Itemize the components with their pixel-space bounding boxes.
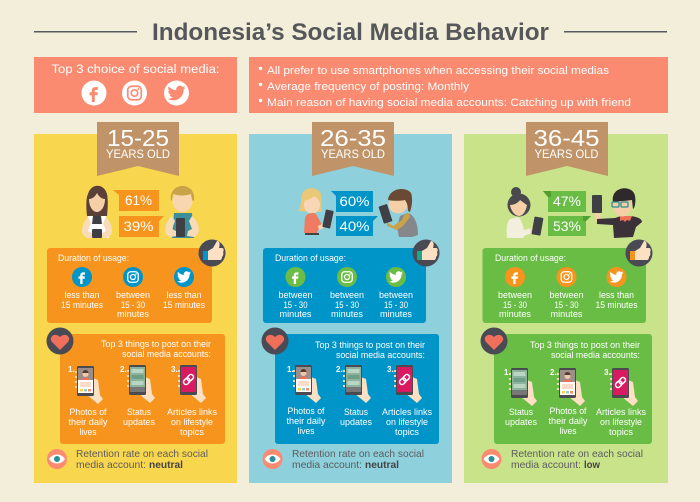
duration panel: 15 minutes <box>163 300 205 310</box>
posting panel: social media accounts: <box>551 350 640 360</box>
posting panel: lives <box>560 426 577 436</box>
illustration: older man with selfie phone <box>592 188 642 238</box>
icon: heart <box>262 328 288 354</box>
posting panel: Photos of <box>70 407 107 417</box>
panel: general facts: Average frequency of posting: Monthly <box>267 81 470 93</box>
duration panel: minutes <box>331 309 364 319</box>
duration panel: between <box>379 290 413 300</box>
retention text: Retention rate on each social <box>292 448 424 460</box>
posting panel: Top 3 things to post on their <box>101 339 211 349</box>
duration panel: minutes <box>550 309 583 319</box>
duration panel: minutes <box>117 309 150 319</box>
40% tag <box>336 216 378 236</box>
panel: age 26-35 <box>249 122 452 483</box>
47% tag <box>543 191 586 212</box>
posting panel: Status <box>509 407 533 417</box>
duration panel <box>47 248 212 323</box>
retention text: Retention rate on each social <box>76 448 208 460</box>
duration panel: 15 - 30 <box>554 300 578 310</box>
duration panel: less than <box>64 290 100 300</box>
posting panel: updates <box>505 417 537 427</box>
posting panel: topics <box>180 427 205 437</box>
60% tag: 60% <box>340 193 370 209</box>
posting panel: 3. <box>387 365 394 374</box>
posting panel: Top 3 things to post on their <box>530 340 640 350</box>
age ribbon 36-45: YEARS OLD <box>534 149 598 161</box>
posting panel: Articles links <box>382 407 432 417</box>
retention text: media account: <box>292 459 362 471</box>
illustration: man with phone <box>378 189 418 237</box>
retention text: media account: <box>76 459 146 471</box>
retention text: neutral <box>149 459 183 471</box>
age ribbon 26-35 <box>312 122 394 176</box>
posting panel: 1. <box>504 368 511 377</box>
39% tag <box>119 216 164 237</box>
duration panel: 15 - 30 <box>503 300 527 310</box>
53% tag: 53% <box>553 218 581 234</box>
duration panel: 15 minutes <box>61 300 103 310</box>
posting panel: on lifestyle <box>386 417 428 427</box>
duration panel: less than <box>166 290 202 300</box>
53% tag <box>548 216 591 236</box>
posting panel: topics <box>395 427 420 437</box>
duration panel: Duration of usage: <box>58 253 129 263</box>
retention text: low <box>584 459 601 471</box>
icon: eye <box>47 449 67 469</box>
age ribbon 36-45 <box>526 122 608 176</box>
retention text <box>292 448 424 471</box>
age ribbon 15-25: 15-25 <box>107 125 169 151</box>
duration panel: minutes <box>380 309 413 319</box>
posting panel: on lifestyle <box>600 417 642 427</box>
posting panel: their daily <box>548 416 588 426</box>
posting panel: 3. <box>604 368 611 377</box>
panel: top 3 choice of social media: Top 3 choice of social media: <box>52 64 220 76</box>
retention text <box>511 448 643 471</box>
60% tag <box>331 191 373 212</box>
posting panel: 1. <box>287 365 294 374</box>
illustration: woman with phone <box>298 188 334 235</box>
duration panel: minutes <box>280 309 312 319</box>
duration panel: between <box>550 290 584 300</box>
posting panel: on lifestyle <box>171 417 213 427</box>
posting panel: Status <box>344 407 368 417</box>
panel: age 15-25 <box>34 122 237 483</box>
posting panel: Status <box>127 407 151 417</box>
duration panel: Duration of usage: <box>275 253 346 263</box>
posting panel: lives <box>80 427 97 437</box>
posting panel: lives <box>298 426 315 436</box>
retention text <box>76 448 208 471</box>
duration panel: 15 - 30 <box>121 300 145 310</box>
duration panel: 15 - 30 <box>284 300 308 310</box>
duration panel: 15 - 30 <box>384 300 408 310</box>
duration panel: 15 minutes <box>596 300 638 310</box>
posting panel <box>494 334 652 444</box>
posting panel: 1. <box>68 365 75 374</box>
duration panel: 15 - 30 <box>335 300 359 310</box>
posting panel <box>60 334 225 444</box>
icon: heart <box>46 328 74 354</box>
duration panel: between <box>498 290 532 300</box>
posting panel: social media accounts: <box>122 349 211 359</box>
icon: eye <box>482 449 502 469</box>
duration panel: minutes <box>499 309 532 319</box>
retention text: neutral <box>365 459 399 471</box>
icon: eye <box>262 449 282 469</box>
title: Indonesia’s Social Media Behavior <box>152 19 549 46</box>
retention text: Retention rate on each social <box>511 448 643 460</box>
panel: general facts: All prefer to use smartphones when accessing their social medias <box>267 65 610 77</box>
posting panel <box>275 334 439 444</box>
duration panel: between <box>330 290 364 300</box>
panel: general facts <box>249 57 668 113</box>
posting panel: Top 3 things to post on their <box>315 340 425 350</box>
icon: thumbs up <box>626 240 652 266</box>
age ribbon 15-25: YEARS OLD <box>106 149 170 161</box>
posting panel: 2. <box>120 365 127 374</box>
age ribbon 26-35: YEARS OLD <box>321 149 385 161</box>
panel: general facts: Main reason of having social media accounts: Catching up with friend <box>267 97 631 109</box>
61% tag <box>113 190 159 211</box>
47% tag: 47% <box>553 193 581 209</box>
duration panel: between <box>116 290 150 300</box>
duration panel: Duration of usage: <box>495 253 566 263</box>
illustration: boy with phone <box>165 186 199 238</box>
duration panel <box>482 248 646 323</box>
posting panel: Photos of <box>288 406 325 416</box>
posting panel: updates <box>123 417 155 427</box>
39% tag: 39% <box>124 218 154 234</box>
posting panel: Articles links <box>167 407 217 417</box>
icon: thumbs up <box>412 240 440 266</box>
posting panel: their daily <box>286 416 326 426</box>
panel: age 36-45 <box>464 122 668 483</box>
posting panel: their daily <box>68 417 108 427</box>
age ribbon 15-25 <box>97 122 179 176</box>
age ribbon 36-45: 36-45 <box>534 125 600 151</box>
posting panel: updates <box>340 417 372 427</box>
posting panel: Articles links <box>596 407 646 417</box>
posting panel: 2. <box>550 368 557 377</box>
40% tag: 40% <box>340 218 370 234</box>
61% tag: 61% <box>125 192 152 208</box>
panel: top 3 choice of social media <box>34 57 237 113</box>
duration panel: less than <box>599 290 634 300</box>
posting panel: 3. <box>171 365 178 374</box>
duration panel: between <box>278 290 312 300</box>
posting panel: topics <box>609 427 634 437</box>
duration panel <box>263 248 426 323</box>
retention text: media account: <box>511 459 581 471</box>
posting panel: social media accounts: <box>336 350 425 360</box>
posting panel: Photos of <box>550 406 587 416</box>
age ribbon 26-35: 26-35 <box>320 125 386 151</box>
illustration: older woman with phone <box>507 187 543 238</box>
icon: heart <box>480 328 508 354</box>
illustration: girl with phone <box>82 186 112 238</box>
icon: thumbs up <box>198 240 226 266</box>
posting panel: 2. <box>336 365 343 374</box>
